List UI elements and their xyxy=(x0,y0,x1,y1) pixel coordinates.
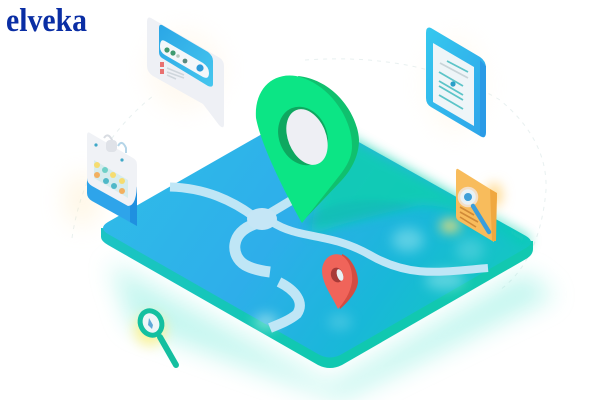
calendar blue base xyxy=(87,158,137,226)
page lines xyxy=(460,207,478,227)
calendar white sheet xyxy=(87,132,137,206)
dashed orbit path xyxy=(72,59,546,290)
red pin hole xyxy=(329,266,345,284)
platform top xyxy=(103,114,531,358)
rating pill xyxy=(160,40,209,78)
document dot xyxy=(450,81,456,87)
orange page xyxy=(456,169,497,242)
pin shadow xyxy=(302,200,415,225)
blue panel xyxy=(159,25,213,87)
green tint on the back right of the surface xyxy=(310,118,530,246)
platform glow xyxy=(110,262,555,400)
pin depth xyxy=(298,76,359,222)
roads xyxy=(170,187,488,328)
stars xyxy=(164,47,187,63)
review card icon xyxy=(147,18,224,127)
calendar icon xyxy=(87,132,137,226)
red pin depth xyxy=(337,254,358,309)
pin hole xyxy=(270,99,336,173)
road junction xyxy=(247,208,277,230)
pin button xyxy=(196,64,204,72)
rings xyxy=(104,135,126,153)
date cells xyxy=(94,160,128,198)
red pin face xyxy=(322,254,352,309)
document icon xyxy=(426,28,486,137)
lens pin xyxy=(148,318,153,329)
speech bubble xyxy=(147,18,224,127)
map platform xyxy=(101,114,533,368)
document sheet xyxy=(433,43,474,126)
large green pin xyxy=(256,75,415,225)
yellow glow xyxy=(134,314,166,346)
red pin xyxy=(322,254,358,309)
review rows xyxy=(160,62,184,79)
lens xyxy=(136,307,166,339)
text lines xyxy=(439,61,468,109)
logo: elveka: elveka xyxy=(6,3,87,39)
platform side xyxy=(101,228,533,368)
orange glow xyxy=(440,183,502,232)
handle xyxy=(160,337,176,365)
document frame xyxy=(426,28,486,137)
warm glows xyxy=(64,30,485,226)
pin face xyxy=(256,75,352,223)
orange search document icon xyxy=(440,169,502,242)
green magnifier icon xyxy=(134,307,176,365)
magnifier xyxy=(459,188,477,206)
light patches on the surface xyxy=(254,228,484,330)
